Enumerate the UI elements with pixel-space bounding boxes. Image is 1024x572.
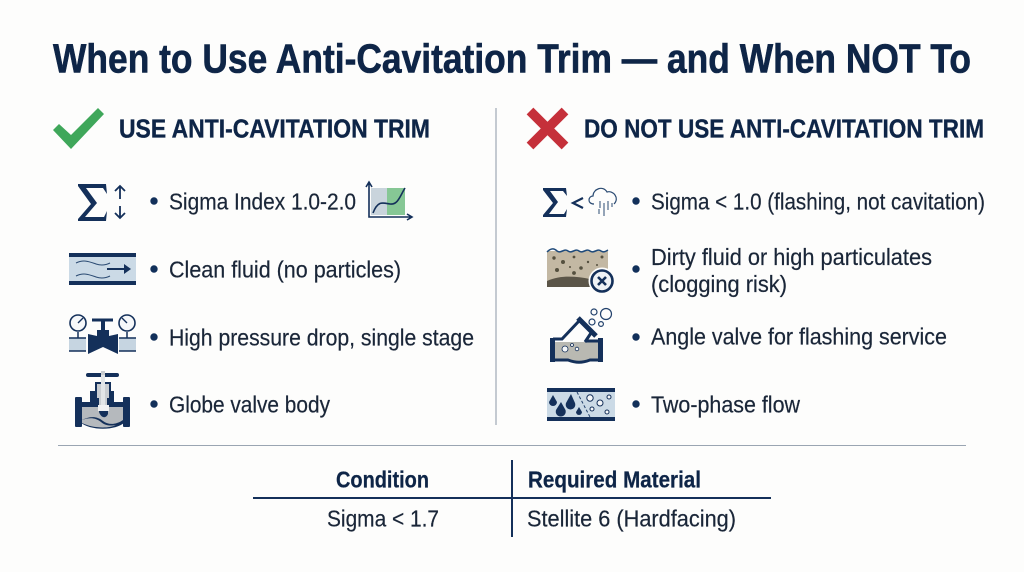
icon: angle valve with bubbles	[550, 308, 612, 362]
chart: sigma range curve	[366, 182, 412, 220]
heading: use: USE ANTI-CAVITATION TRIM	[119, 116, 430, 144]
bullet	[632, 265, 640, 273]
icon: two-phase flow pipe	[547, 388, 615, 421]
table: condition and required material	[253, 460, 771, 537]
text: sigma index: Sigma Index 1.0-2.0	[169, 188, 356, 214]
icon: green check mark	[53, 108, 104, 149]
bullet	[632, 333, 640, 341]
text: dirty fluid: Dirty fluid or high particulates	[651, 244, 932, 270]
panel: do not use anti-cavitation trim	[530, 111, 985, 421]
heading: do not use: DO NOT USE ANTI-CAVITATION TRIM	[584, 116, 984, 144]
center divider	[496, 108, 497, 425]
text: sigma less than 1: Sigma < 1.0 (flashing, not cavitation)	[651, 188, 985, 214]
horizontal separator	[58, 445, 966, 446]
bullet	[632, 197, 640, 205]
text: globe valve body: Globe valve body	[169, 392, 330, 418]
bullet	[150, 265, 158, 273]
icon: dirty fluid	[547, 249, 616, 294]
panel: use anti-cavitation trim	[53, 108, 474, 429]
icon: red cross	[530, 111, 565, 146]
table header: required material: Required Material	[528, 466, 701, 492]
icon: clean fluid pipe	[69, 253, 136, 285]
table cell: sigma: Sigma < 1.7	[327, 506, 439, 532]
text: high pressure drop: High pressure drop, single stage	[169, 324, 474, 350]
text: angle valve: Angle valve for flashing service	[651, 324, 947, 350]
icon: sigma less than cloud	[543, 188, 616, 217]
text: dirty fluid	[651, 244, 932, 297]
table cell: material: Stellite 6 (Hardfacing)	[527, 506, 736, 532]
bullet	[150, 333, 158, 341]
icon: globe valve	[75, 371, 130, 429]
table header: condition: Condition	[336, 466, 429, 492]
bullet	[150, 400, 158, 408]
text: dirty fluid: (clogging risk)	[651, 271, 787, 297]
text: two-phase flow: Two-phase flow	[651, 392, 800, 418]
bullet	[632, 400, 640, 408]
icon: valve with pressure gauges	[69, 315, 136, 354]
text: clean fluid: Clean fluid (no particles)	[169, 256, 401, 282]
icon: sigma with up-down arrows	[78, 184, 125, 221]
bullet	[150, 197, 158, 205]
